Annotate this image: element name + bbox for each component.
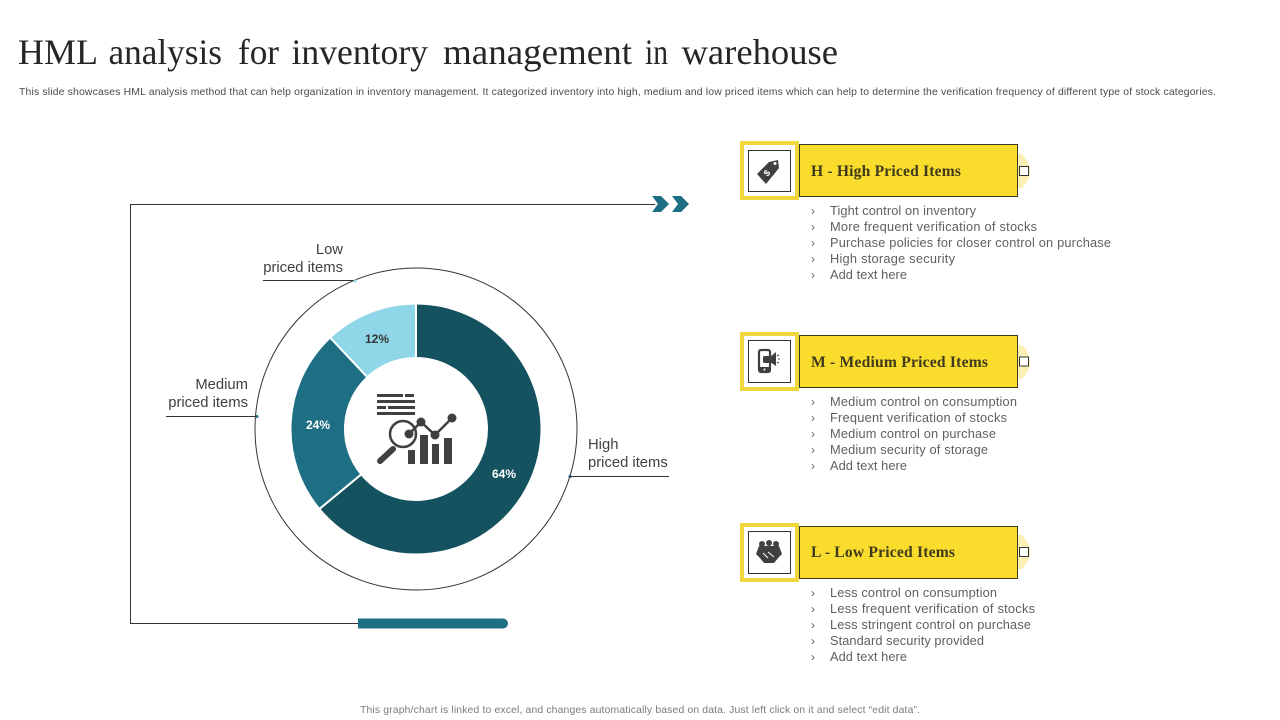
header tab glow — [1017, 345, 1030, 379]
slice: medium 24% — [290, 338, 367, 509]
bullet list: › — [811, 602, 815, 616]
bullet list: Purchase policies for closer control on purchase — [830, 235, 1111, 250]
title: inventory — [292, 32, 428, 72]
label: high priced items: High — [588, 437, 618, 453]
label: low priced items: priced items — [263, 260, 343, 276]
icon: price tag — [757, 160, 779, 184]
slice: low 12% — [330, 304, 416, 377]
bullet list: › — [811, 459, 815, 473]
title: analysis — [108, 32, 222, 72]
bullet list: Medium control on purchase — [830, 426, 996, 441]
title: in — [645, 32, 668, 72]
bullet list: Add text here — [830, 458, 907, 473]
bullet list: Frequent verification of stocks — [830, 410, 1007, 425]
title: warehouse — [682, 32, 838, 72]
label: medium priced items: Medium — [195, 377, 248, 393]
bullet list: Less frequent verification of stocks — [830, 601, 1035, 616]
heading: L - Low Priced Items — [811, 544, 955, 561]
label: low priced items — [263, 242, 356, 282]
icon frame — [742, 525, 797, 580]
bracket connector with arrows and bar — [130, 196, 689, 628]
header bar — [800, 526, 1018, 578]
bullet list: › — [811, 411, 815, 425]
bullet list — [811, 585, 1035, 664]
heading: M - Medium Priced Items — [811, 354, 988, 371]
small square marker — [1020, 357, 1028, 366]
bullet list: Add text here — [830, 649, 907, 664]
icon: analytics magnifier — [377, 394, 456, 464]
bullet list: More frequent verification of stocks — [830, 219, 1037, 234]
bullet list: Less control on consumption — [830, 585, 997, 600]
bullet list — [811, 203, 1111, 282]
bullet list: › — [811, 204, 815, 218]
icon frame — [742, 334, 797, 389]
donut chart — [255, 268, 577, 590]
panel: low priced items — [742, 525, 1035, 664]
icon: double chevron arrow — [652, 196, 689, 212]
icon: handshake group — [756, 540, 782, 563]
bullet list: Add text here — [830, 267, 907, 282]
bullet list: › — [811, 395, 815, 409]
bullet list: › — [811, 252, 815, 266]
title — [18, 32, 838, 72]
header bar — [800, 144, 1018, 196]
footer note: This graph/chart is linked to excel, and changes automatically based on data. Just left click on it and select “edit data”. — [360, 705, 920, 716]
header tab glow — [1017, 535, 1030, 569]
header tab glow — [1017, 154, 1030, 188]
bullet list: › — [811, 236, 815, 250]
bullet list: › — [811, 634, 815, 648]
label: medium priced items: priced items — [168, 395, 248, 411]
teal rounded bar — [358, 618, 508, 628]
small square marker — [1020, 166, 1028, 176]
bullet list: › — [811, 268, 815, 282]
title: HML — [18, 32, 98, 72]
header bar — [800, 336, 1018, 388]
bullet list: › — [811, 427, 815, 441]
icon: price tag: $ — [762, 168, 772, 178]
bullet list: › — [811, 586, 815, 600]
label: low priced items: Low — [316, 242, 343, 258]
value: 24%: 24% — [306, 418, 330, 432]
bullet list: Less stringent control on purchase — [830, 617, 1031, 632]
label: medium priced items — [166, 377, 258, 418]
bullet list: › — [811, 650, 815, 664]
icon: phone with megaphone — [759, 350, 780, 372]
bullet list: › — [811, 618, 815, 632]
bullet list: › — [811, 443, 815, 457]
bullet list: Medium security of storage — [830, 442, 988, 457]
bullet list: › — [811, 220, 815, 234]
bullet list — [811, 394, 1017, 473]
value: 64%: 64% — [492, 467, 516, 481]
value: 12%: 12% — [365, 332, 389, 346]
panel: medium priced items — [742, 334, 1030, 473]
bullet list: Tight control on inventory — [830, 203, 977, 218]
panel: high priced items — [742, 143, 1111, 282]
slice: high 64% — [319, 304, 541, 555]
title: for — [238, 32, 279, 72]
icon frame — [742, 143, 797, 198]
title: management — [443, 32, 632, 72]
subtitle description: This slide showcases HML analysis method that can help organization in inventory management. It categorized inventory into high, medium and low priced items which can help to determine the verification frequency of different type of stock categories. — [19, 87, 1216, 98]
bullet list: Medium control on consumption — [830, 394, 1017, 409]
label: high priced items: priced items — [588, 455, 668, 471]
bullet list: High storage security — [830, 251, 956, 266]
small square marker — [1020, 548, 1028, 556]
label: high priced items — [568, 437, 669, 478]
bullet list: Standard security provided — [830, 633, 984, 648]
heading: H - High Priced Items — [811, 163, 961, 180]
